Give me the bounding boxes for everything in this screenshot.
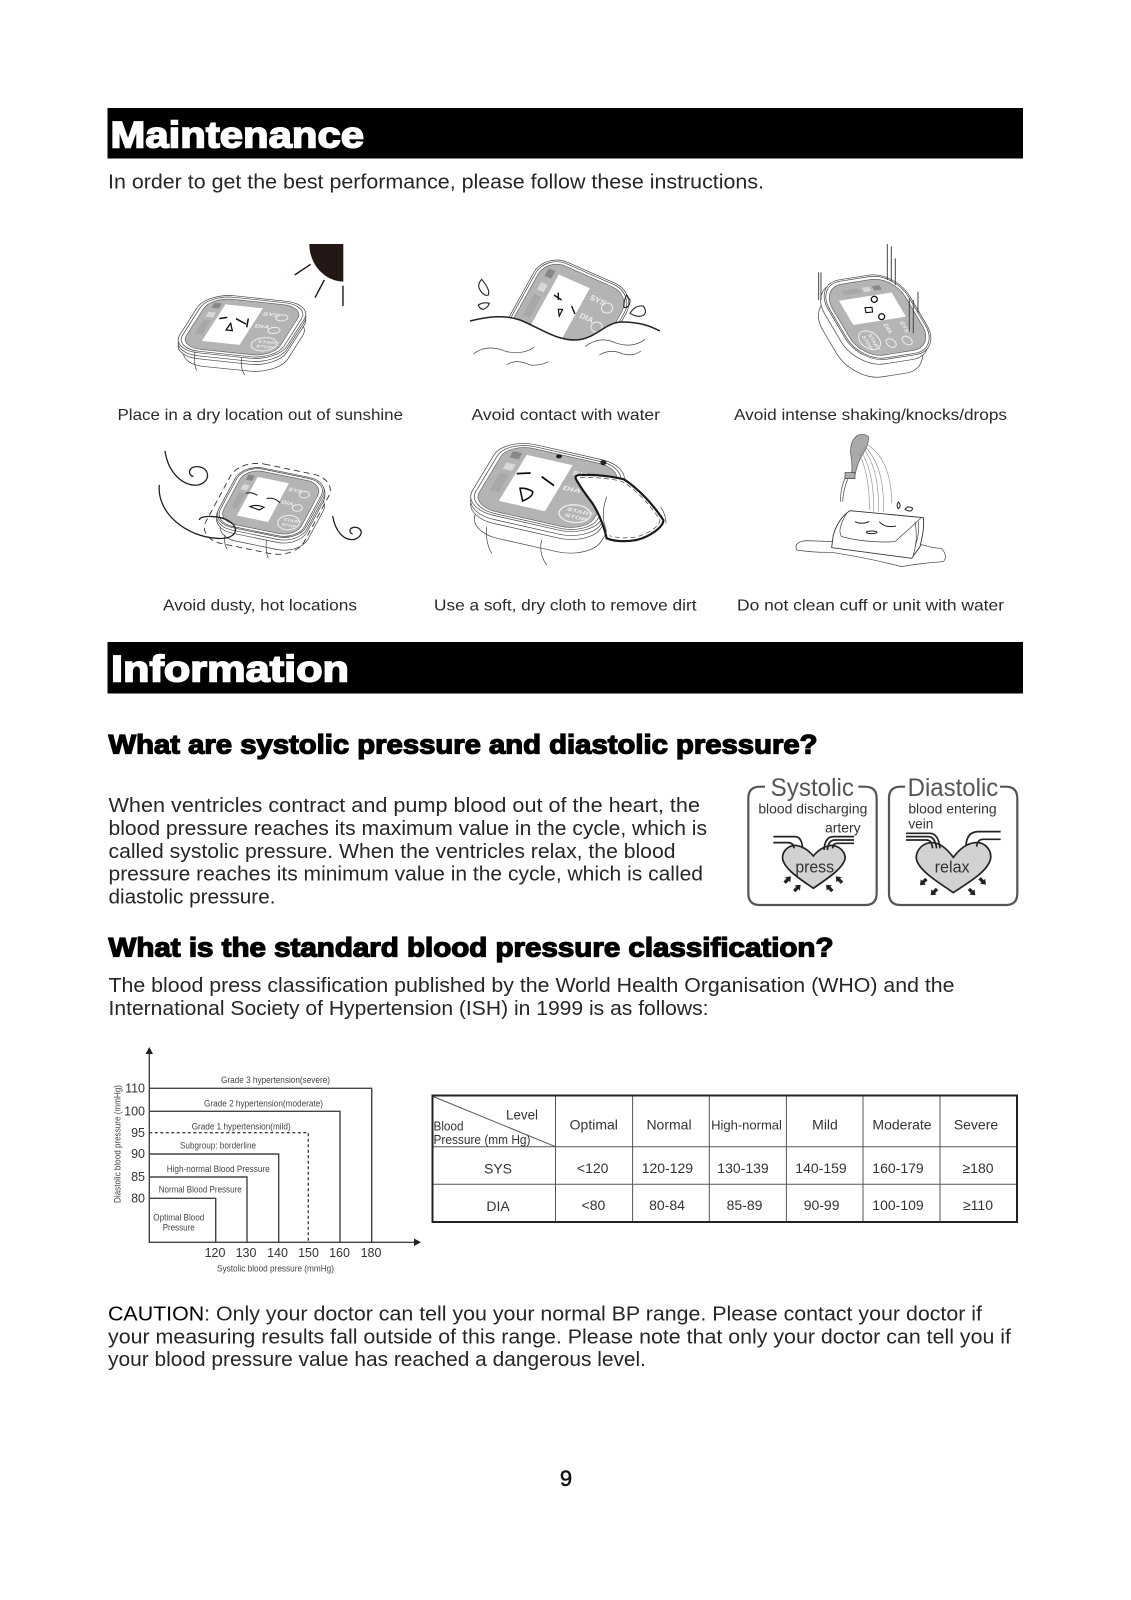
icon: sun — [309, 244, 343, 282]
caution note: CAUTION : Only your doctor can tell you your normal BP range. Please contact your doctor if — [108, 1304, 982, 1326]
chart: blood pressure staircase: Normal Blood Pressure — [159, 1185, 242, 1195]
chart: blood pressure staircase: 85 — [131, 1170, 145, 1184]
illustration: device in dusty location — [159, 451, 361, 559]
icon: cloth — [575, 475, 663, 541]
illustration: device away from sunshine: START — [256, 340, 281, 346]
illustration: cleaning with cloth: START — [566, 507, 595, 518]
chart: blood pressure staircase — [112, 1047, 421, 1274]
chart: blood pressure staircase: High-normal Blood Pressure — [167, 1164, 270, 1174]
paragraph: classification source: International Society of Hypertension (ISH) in 1999 is as follows: — [108, 998, 708, 1020]
caution note: your measuring results fall outside of this range. Please note that only your doctor can tell you if — [108, 1326, 1011, 1348]
intro text: In order to get the best performance, please follow these instructions. — [108, 172, 764, 194]
diagram: diastolic heart: blood entering — [908, 800, 997, 816]
caption: shaking: Avoid intense shaking/knocks/drops — [734, 407, 1007, 424]
illustration: device dropping: STOP — [860, 335, 873, 350]
illustration: device in dusty location: START — [282, 517, 302, 525]
subheading: classification: What is the standard blood pressure classification? — [108, 932, 834, 962]
chart: blood pressure staircase: 150 — [298, 1246, 319, 1260]
table: classification values: 80-84 — [649, 1197, 685, 1213]
chart: blood pressure staircase: Pressure — [163, 1222, 195, 1232]
table: classification values: ≥180 — [962, 1160, 994, 1176]
paragraph: systolic and diastolic: When ventricles contract and pump blood out of the heart, the — [108, 795, 700, 817]
illustration: device in water: SYS — [588, 293, 608, 308]
paragraph: systolic and diastolic: blood pressure reaches its maximum value in the cycle, which is — [108, 818, 707, 840]
table: classification values: 120-129 — [642, 1160, 693, 1176]
diagram: diastolic heart: Diastolic — [908, 774, 998, 802]
caption: cloth: Use a soft, dry cloth to remove dirt — [434, 598, 697, 614]
illustration: device dropping: SYS — [897, 321, 911, 333]
diagram: diastolic heart: relax — [935, 858, 970, 877]
chart: blood pressure staircase: Grade 1 hypertension(mild) — [192, 1121, 291, 1131]
caption: water: Avoid contact with water — [472, 407, 661, 424]
table: classification values: 85-89 — [727, 1197, 763, 1213]
illustration: device away from sunshine: SYS — [261, 311, 281, 318]
paragraph: systolic and diastolic — [108, 795, 707, 908]
paragraph: classification source: The blood press classification published by the World Health Organisation (WHO) and the — [108, 975, 954, 997]
table: classification values: 130-139 — [717, 1160, 769, 1176]
diagram: systolic heart — [748, 774, 877, 905]
table: classification values: <80 — [582, 1197, 605, 1213]
table: classification values: Severe — [954, 1116, 998, 1132]
table: classification values: 100-109 — [872, 1197, 924, 1213]
table: classification values: 160-179 — [872, 1160, 924, 1176]
chart: blood pressure staircase: 160 — [329, 1246, 350, 1260]
illustration: cuff under shower — [796, 434, 945, 567]
chart: blood pressure staircase: 90 — [131, 1147, 145, 1161]
chart: blood pressure staircase: 120 — [205, 1246, 225, 1260]
chart: blood pressure staircase: 80 — [131, 1192, 145, 1206]
subheading: systolic and diastolic: What are systolic pressure and diastolic pressure? — [108, 730, 818, 760]
table: classification values: Pressure (mm Hg) — [434, 1132, 530, 1147]
paragraph: classification source — [108, 975, 954, 1020]
illustration: cleaning with cloth: STOP — [563, 513, 588, 523]
diagram: systolic heart: press — [795, 858, 834, 877]
table: classification values: <120 — [577, 1160, 609, 1176]
table: classification values: Level — [506, 1106, 538, 1122]
chart: blood pressure staircase: Systolic blood pressure (mmHg) — [217, 1264, 334, 1274]
table: classification values: Blood — [434, 1118, 464, 1134]
illustration: device in water — [470, 252, 660, 400]
chart: blood pressure staircase: Optimal Blood — [153, 1213, 204, 1223]
chart: blood pressure staircase: 100 — [124, 1104, 145, 1118]
paragraph: systolic and diastolic: called systolic pressure. When the ventricles relax, the blood — [108, 841, 676, 863]
diagram: diastolic heart — [889, 774, 1017, 905]
table: classification values: 90-99 — [804, 1197, 840, 1213]
heading: Information: Information — [111, 648, 349, 690]
caption: dusty: Avoid dusty, hot locations — [163, 598, 357, 614]
page number: 9 — [560, 1466, 572, 1491]
chart: blood pressure staircase: 140 — [267, 1246, 288, 1260]
illustration: device dropping — [806, 244, 942, 381]
illustration: cleaning with cloth: DIA — [561, 484, 584, 495]
table: classification values: Optimal — [570, 1116, 618, 1132]
table: classification values: 140-159 — [795, 1160, 847, 1176]
table: classification values: SYS — [484, 1160, 512, 1176]
illustration: device in water: DIA — [578, 311, 595, 325]
chart: blood pressure staircase: 180 — [361, 1246, 381, 1260]
chart: blood pressure staircase: 95 — [131, 1126, 145, 1140]
diagram: diastolic heart: vein — [908, 815, 933, 831]
table: classification values: High-normal — [711, 1118, 782, 1132]
caption: no water cleaning: Do not clean cuff or unit with water — [737, 598, 1005, 614]
illustration: device away from sunshine: STOP — [254, 345, 275, 350]
table: classification values — [432, 1095, 1017, 1222]
diagram: systolic heart: blood discharging — [758, 800, 867, 816]
caution note — [108, 1304, 1011, 1371]
illustration: device in dusty location: DIA — [280, 500, 295, 507]
chart: blood pressure staircase: 110 — [125, 1082, 145, 1096]
chart: blood pressure staircase: Subgroup: borderline — [180, 1141, 256, 1151]
heading: Maintenance: Maintenance — [110, 114, 364, 156]
illustration: device dropping: START — [866, 334, 881, 351]
chart: blood pressure staircase: Grade 2 hypertension(moderate) — [204, 1098, 323, 1108]
illustration: cleaning with cloth: SYS — [570, 469, 595, 480]
chart: blood pressure staircase: Grade 3 hypertension(severe) — [221, 1075, 330, 1085]
illustration: device away from sunshine: DIA — [253, 323, 271, 330]
heading: Maintenance — [108, 108, 1023, 158]
caution note: your blood pressure value has reached a dangerous level. — [108, 1349, 646, 1371]
table: classification values: Normal — [646, 1116, 692, 1132]
caption: sunshine: Place in a dry location out of sunshine — [118, 407, 403, 424]
illustration: cleaning with cloth — [462, 438, 666, 565]
illustration: device away from sunshine — [170, 244, 343, 375]
chart: blood pressure staircase: 130 — [236, 1246, 256, 1260]
table: classification values: Moderate — [872, 1116, 932, 1132]
diagram: systolic heart: artery — [825, 819, 861, 835]
illustration: device in dusty location: STOP — [280, 522, 298, 530]
table: classification values: ≥110 — [963, 1197, 993, 1213]
illustration: device in dusty location: SYS — [287, 487, 304, 495]
chart: blood pressure staircase: Diastolic blood pressure (mmHg) — [112, 1085, 122, 1203]
heading: Information — [108, 642, 1023, 694]
table: classification values: Mild — [812, 1116, 838, 1132]
paragraph: systolic and diastolic: pressure reaches its minimum value in the cycle, which is called — [108, 864, 703, 886]
paragraph: systolic and diastolic: diastolic pressure. — [108, 886, 276, 908]
diagram: systolic heart: Systolic — [771, 774, 854, 802]
table: classification values: DIA — [486, 1198, 510, 1214]
illustration: device dropping: DIA — [881, 323, 894, 335]
